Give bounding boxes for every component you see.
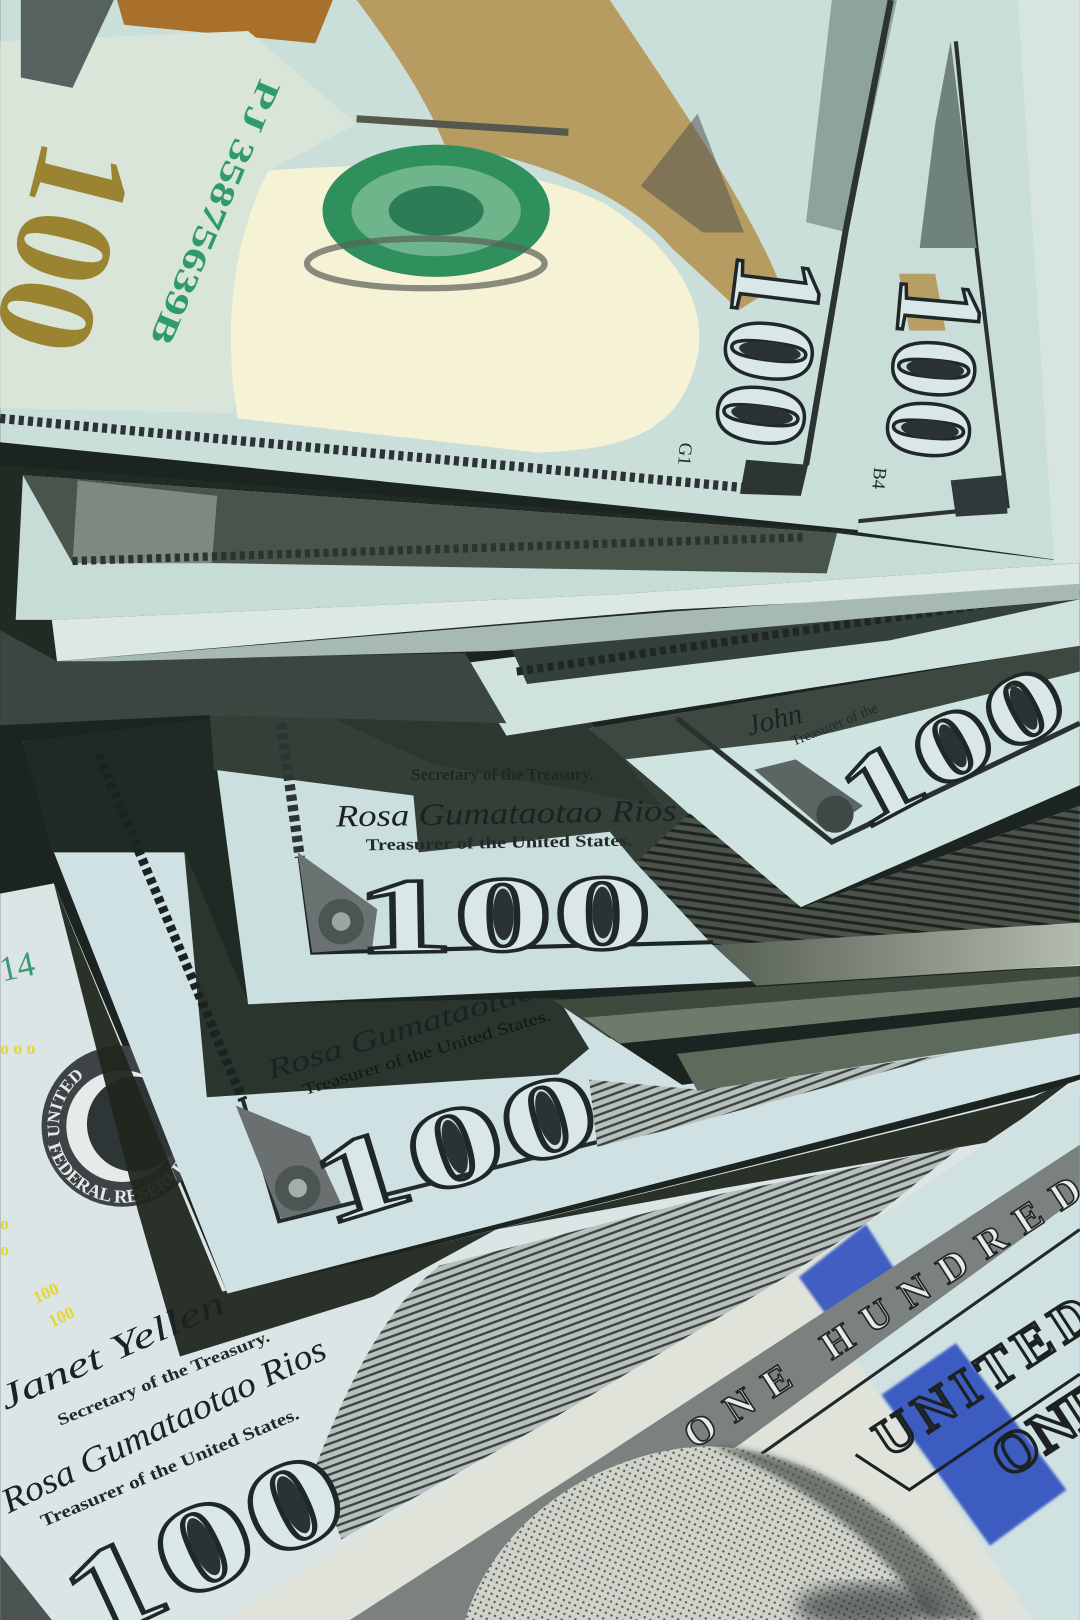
note lower right sliver — [677, 1007, 1080, 1091]
tan portrait shading — [357, 0, 780, 310]
bill: middle right corner note — [589, 641, 1080, 907]
corner dark mark — [21, 0, 114, 88]
shadow across center note — [210, 715, 703, 863]
second note corner block — [951, 475, 1008, 517]
engraved hair on lower note — [589, 1054, 951, 1147]
yellow microprinted 100s: 100 — [45, 1302, 78, 1331]
bill: middle right upper note — [463, 584, 1080, 736]
scroll ornament — [298, 852, 377, 953]
dark engraved shadow area — [636, 806, 1080, 945]
stack edges below center note — [553, 966, 1080, 1043]
bill: top note — [0, 0, 899, 530]
scroll ornament right — [754, 759, 863, 833]
plate letter: G1 — [673, 442, 696, 466]
yellow microprinted 100s: o — [0, 1213, 9, 1233]
caption secretary: Secretary of the Treasury. — [411, 765, 594, 784]
united frame line — [856, 1374, 1080, 1490]
federal reserve seal — [42, 1046, 182, 1207]
caption treasurer: Treasurer of the United States. — [366, 831, 632, 854]
dark band at left — [0, 630, 506, 725]
seal lettering united: UNITED — [47, 1070, 82, 1137]
ornament corner — [0, 1555, 52, 1620]
cream portrait window — [231, 166, 699, 453]
bill: top stack second note at right — [853, 0, 1080, 563]
shaded signature: John — [743, 698, 805, 742]
yellow microprinted 100s: o — [0, 1239, 9, 1259]
plate letter right: B4 — [867, 467, 890, 490]
numeral: top 100: 100 — [687, 246, 853, 456]
orange ink patch — [117, 0, 333, 43]
stack edge bills — [0, 465, 1080, 661]
signature lower: Rosa Gumataotao — [262, 974, 540, 1087]
left paper tone — [0, 31, 357, 413]
band inner thin rule — [754, 1229, 1080, 1459]
numeral: right 100: 100 — [859, 272, 1010, 466]
corner rule — [677, 718, 1080, 842]
treasurer signature: Rosa Gumataotao Rios — [0, 1329, 332, 1521]
shadow across lower note — [184, 849, 589, 1097]
hair shading — [713, 1446, 982, 1620]
green treasury seal — [307, 119, 568, 288]
Franklin head — [465, 1446, 982, 1620]
engraved top border band — [331, 1145, 1080, 1620]
right border engraving — [806, 0, 897, 232]
yellow microprinted 100s — [0, 1038, 78, 1331]
grey shaded strip — [713, 923, 1080, 986]
shadow cast by lower note — [54, 883, 1080, 1357]
shadow upper left of lower note — [23, 718, 248, 1004]
corner block — [740, 460, 808, 496]
second note engraved band — [920, 41, 977, 248]
corner rule — [243, 1100, 661, 1221]
yellow microprinted 100s: 100 — [30, 1278, 62, 1307]
bill: lower note — [23, 718, 1080, 1294]
second note tan patch — [899, 274, 946, 331]
blue security ribbon upper — [799, 1224, 897, 1318]
engraved portrait hair — [315, 1147, 961, 1539]
bill: bottom right note — [222, 1080, 1080, 1620]
blue security ribbon lower — [881, 1343, 1066, 1546]
secretary caption: Secretary of the Treasury. — [54, 1327, 272, 1429]
left border dentil — [281, 723, 300, 858]
signature: Rosa Gumataotao Rios — [334, 793, 677, 834]
border dentils — [98, 754, 243, 1100]
border rule — [806, 0, 891, 465]
bill: bottom left note — [0, 883, 1080, 1620]
seal lettering federal reserve: FEDERAL RESERVE — [48, 1142, 181, 1203]
numeral: center 100: 100 — [353, 852, 653, 977]
yellow microprinted 100s: o o o — [0, 1038, 35, 1058]
corner rule center — [300, 858, 713, 953]
caption lower: Treasurer of the United States. — [301, 1005, 553, 1099]
shadow top of corner note — [589, 646, 1080, 759]
treasurer caption: Treasurer of the United States. — [37, 1403, 302, 1531]
engraved letter mass — [641, 114, 744, 232]
second note border rule — [853, 41, 1008, 522]
scroll ornament lower — [236, 1105, 341, 1219]
numeral: right corner 100: 100 — [820, 641, 1080, 851]
darker shadow top of center note — [279, 694, 661, 806]
serial number: PJ 35875639B — [142, 74, 286, 350]
Franklin brow shadow — [796, 1584, 940, 1620]
one hundred lettering: ONE HUNDRED — [676, 1168, 1080, 1457]
dentil border — [0, 418, 744, 488]
bill: center note — [210, 694, 1080, 1004]
numeral: lower 100: 100 — [296, 1044, 613, 1250]
shaded caption: Treasurer of the — [789, 700, 880, 750]
